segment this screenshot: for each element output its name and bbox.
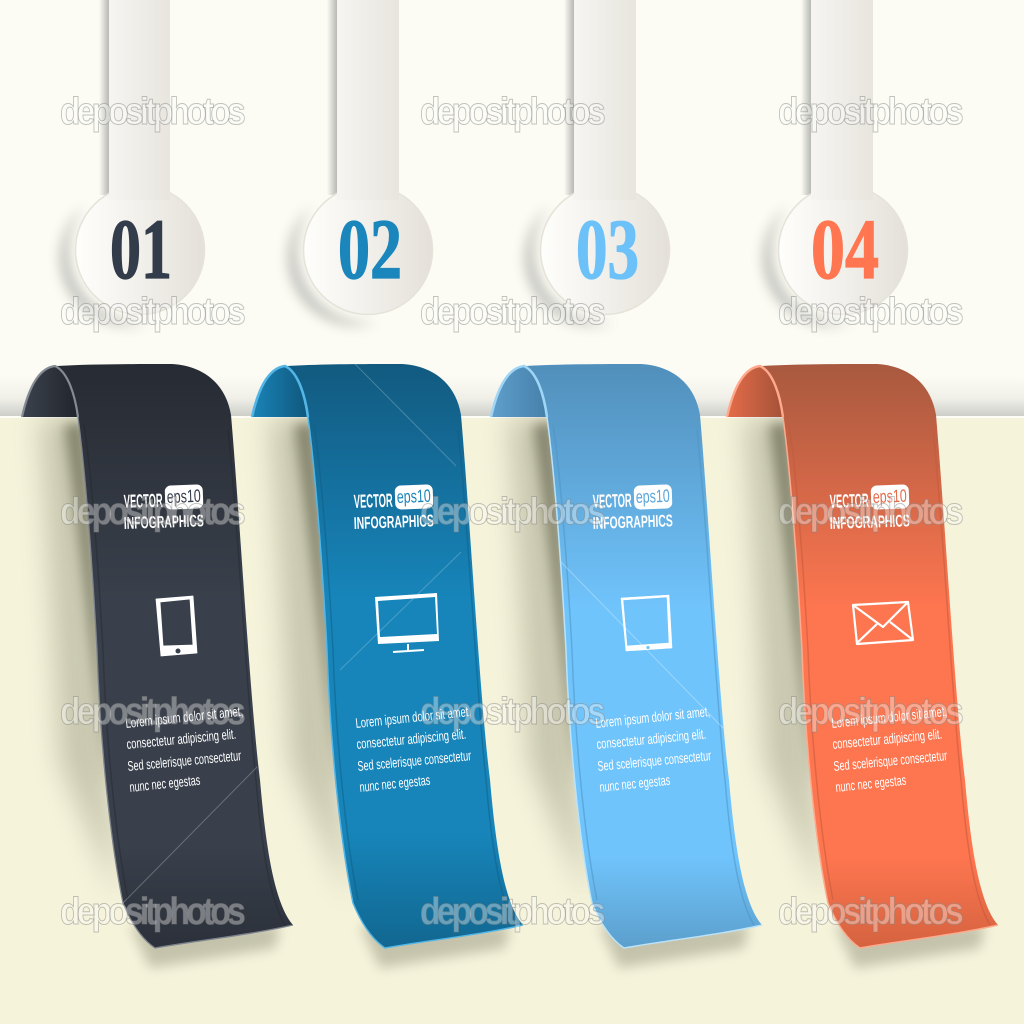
watermarks: depositphotos bbox=[420, 290, 606, 332]
watermarks: depositphotos bbox=[420, 890, 606, 932]
ribbon 4: orange bbox=[727, 364, 998, 948]
pin 4 bbox=[763, 0, 908, 326]
icon: envelope bbox=[853, 602, 913, 644]
ribbon 2 front bbox=[287, 364, 523, 948]
ribbon 4 body text: nunc nec egestas bbox=[835, 772, 907, 795]
ribbon 4 fold rim bbox=[727, 366, 783, 417]
ribbon 2 title: INFOGRAPHICS bbox=[353, 511, 434, 533]
shadow band above fold bbox=[0, 376, 1024, 417]
ribbon 4 front bbox=[762, 364, 998, 948]
ribbon 4 body text bbox=[831, 703, 948, 795]
ribbon 2 creases bbox=[314, 425, 515, 925]
ribbon 3 body text: Lorem ipsum dolor sit amet, bbox=[595, 703, 711, 731]
ribbon 2: blue bbox=[252, 364, 523, 948]
ribbon 3 body text: consectetur adipiscing elit. bbox=[596, 726, 707, 752]
watermarks: depositphotos bbox=[778, 690, 964, 732]
ribbon 1 sheen line bbox=[123, 767, 257, 903]
ribbon 1 title bbox=[123, 484, 204, 533]
pin 4 side shadow bbox=[801, 0, 811, 195]
tablet button bbox=[646, 646, 650, 649]
ribbon 2 title: VECTOR bbox=[353, 491, 393, 513]
pin 3 side shadow bbox=[564, 0, 574, 195]
ribbon 3 body text: nunc nec egestas bbox=[599, 772, 671, 795]
watermarks: depositphotos bbox=[778, 490, 964, 532]
background: upper wall bbox=[0, 0, 1024, 417]
ribbon 2 body text: Sed scelerisque consectetur bbox=[357, 747, 472, 774]
ribbon 4 title: VECTOR bbox=[829, 491, 869, 513]
ribbon 2 back fold bbox=[252, 366, 308, 417]
watermarks: depositphotos bbox=[60, 290, 246, 332]
ribbon 2 body text: Lorem ipsum dolor sit amet, bbox=[355, 703, 472, 731]
ribbon shadows: close layer bbox=[64, 420, 811, 790]
fold highlight bbox=[0, 416, 1024, 418]
ribbon 3 title: INFOGRAPHICS bbox=[592, 511, 673, 533]
icon: tablet bbox=[621, 595, 672, 651]
ribbon 2 body text: nunc nec egestas bbox=[359, 772, 431, 795]
ribbon 1 front bbox=[57, 364, 293, 948]
ribbon 3 sheen line bbox=[561, 562, 723, 728]
ribbon 3 fold rim bbox=[491, 366, 547, 417]
ribbon 4 body text: consectetur adipiscing elit. bbox=[832, 726, 943, 752]
ribbon 1 edge highlight bbox=[78, 417, 293, 948]
icon: monitor bbox=[375, 593, 439, 652]
ribbon 1 back fold bbox=[22, 366, 78, 417]
ribbon 4 title: eps10 bbox=[872, 486, 907, 507]
number 04: 04 bbox=[811, 201, 879, 297]
ribbon 2 edge highlight bbox=[308, 417, 523, 948]
ribbon 4 body text: Sed scelerisque consectetur bbox=[833, 747, 948, 774]
ribbon 2 title: eps10 bbox=[396, 486, 431, 507]
ribbon 1 body text: nunc nec egestas bbox=[129, 772, 201, 795]
ribbon 4 creases bbox=[789, 425, 990, 925]
number 02: 02 bbox=[338, 201, 402, 297]
ribbon 3 back fold bbox=[491, 366, 547, 417]
ribbon 3 edge highlight bbox=[547, 417, 762, 948]
icon: phone bbox=[156, 596, 197, 656]
ribbon 1 creases bbox=[84, 425, 285, 925]
ribbon shadows: wide soft layer bbox=[40, 417, 825, 900]
ribbon 4 body text: Lorem ipsum dolor sit amet, bbox=[831, 703, 948, 731]
pin 4 disc bbox=[778, 186, 908, 314]
ribbon 4 edge highlight bbox=[783, 417, 998, 948]
pin 2 tab bbox=[337, 0, 399, 200]
ribbon 1 title: VECTOR bbox=[123, 491, 163, 513]
pin 1 bbox=[60, 0, 204, 326]
ribbon 3: light blue bbox=[491, 364, 762, 948]
pin 2 disc shadow bbox=[288, 205, 378, 326]
watermarks: depositphotos bbox=[420, 690, 606, 732]
watermarks: depositphotos bbox=[778, 290, 964, 332]
ribbon 4 back fold bbox=[727, 366, 783, 417]
ribbon 1 body text bbox=[125, 703, 244, 795]
pin 3 tab bbox=[574, 0, 636, 200]
ribbon 1 title: eps10 bbox=[166, 486, 201, 507]
number 03: 03 bbox=[576, 201, 639, 297]
ribbon 3 title: VECTOR bbox=[592, 491, 632, 513]
pin 4 disc shadow bbox=[763, 205, 853, 326]
ribbon 3 creases bbox=[553, 425, 754, 925]
ribbon 3 body text: Sed scelerisque consectetur bbox=[597, 747, 712, 774]
ribbon 1 body text: Sed scelerisque consectetur bbox=[127, 747, 242, 774]
ribbon 1: dark bbox=[22, 364, 293, 948]
phone button bbox=[176, 648, 180, 654]
ribbon 2 title bbox=[353, 484, 434, 533]
ribbon 4 title: INFOGRAPHICS bbox=[829, 511, 910, 533]
ribbon 3 title bbox=[592, 484, 673, 533]
pin 3 bbox=[525, 0, 670, 326]
pin 3 disc bbox=[540, 186, 670, 314]
ribbon 3 front bbox=[526, 364, 762, 948]
pin 1 disc shadow bbox=[60, 205, 150, 326]
background: lower sheet bbox=[0, 417, 1024, 1024]
ribbon 1 body text: Lorem ipsum dolor sit amet, bbox=[125, 703, 244, 731]
watermarks: depositphotos bbox=[778, 890, 964, 932]
pin 1 side shadow bbox=[99, 0, 109, 195]
ribbon shadows: under the tips bbox=[130, 925, 985, 968]
pin 2 bbox=[288, 0, 432, 326]
pin 2 disc bbox=[304, 186, 432, 314]
watermarks: depositphotos bbox=[778, 90, 964, 132]
ribbon 2 sheen lines bbox=[340, 364, 461, 670]
pin 3 disc shadow bbox=[525, 205, 615, 326]
ribbon 3 title: eps10 bbox=[635, 486, 670, 507]
pin 1 tab bbox=[109, 0, 170, 200]
watermarks: depositphotos bbox=[60, 490, 246, 532]
watermarks: depositphotos bbox=[420, 90, 606, 132]
ribbon 1 fold rim bbox=[22, 366, 78, 417]
pin 4 tab bbox=[811, 0, 873, 200]
pin 1 disc bbox=[76, 186, 204, 314]
watermarks: depositphotos bbox=[420, 490, 606, 532]
ribbon 4 title bbox=[829, 484, 910, 533]
ribbon 1 body text: consectetur adipiscing elit. bbox=[126, 726, 237, 752]
pin 2 side shadow bbox=[327, 0, 337, 195]
watermarks bbox=[60, 90, 964, 932]
ribbon 1 title: INFOGRAPHICS bbox=[123, 511, 204, 533]
ribbon 3 body text bbox=[595, 703, 712, 795]
watermarks: depositphotos bbox=[60, 690, 246, 732]
watermarks: depositphotos bbox=[60, 890, 246, 932]
ribbon 2 fold rim bbox=[252, 366, 308, 417]
watermarks: depositphotos bbox=[60, 90, 246, 132]
ribbon 2 body text bbox=[355, 703, 472, 795]
ribbon 2 body text: consectetur adipiscing elit. bbox=[356, 726, 467, 752]
number 01: 01 bbox=[110, 201, 172, 297]
